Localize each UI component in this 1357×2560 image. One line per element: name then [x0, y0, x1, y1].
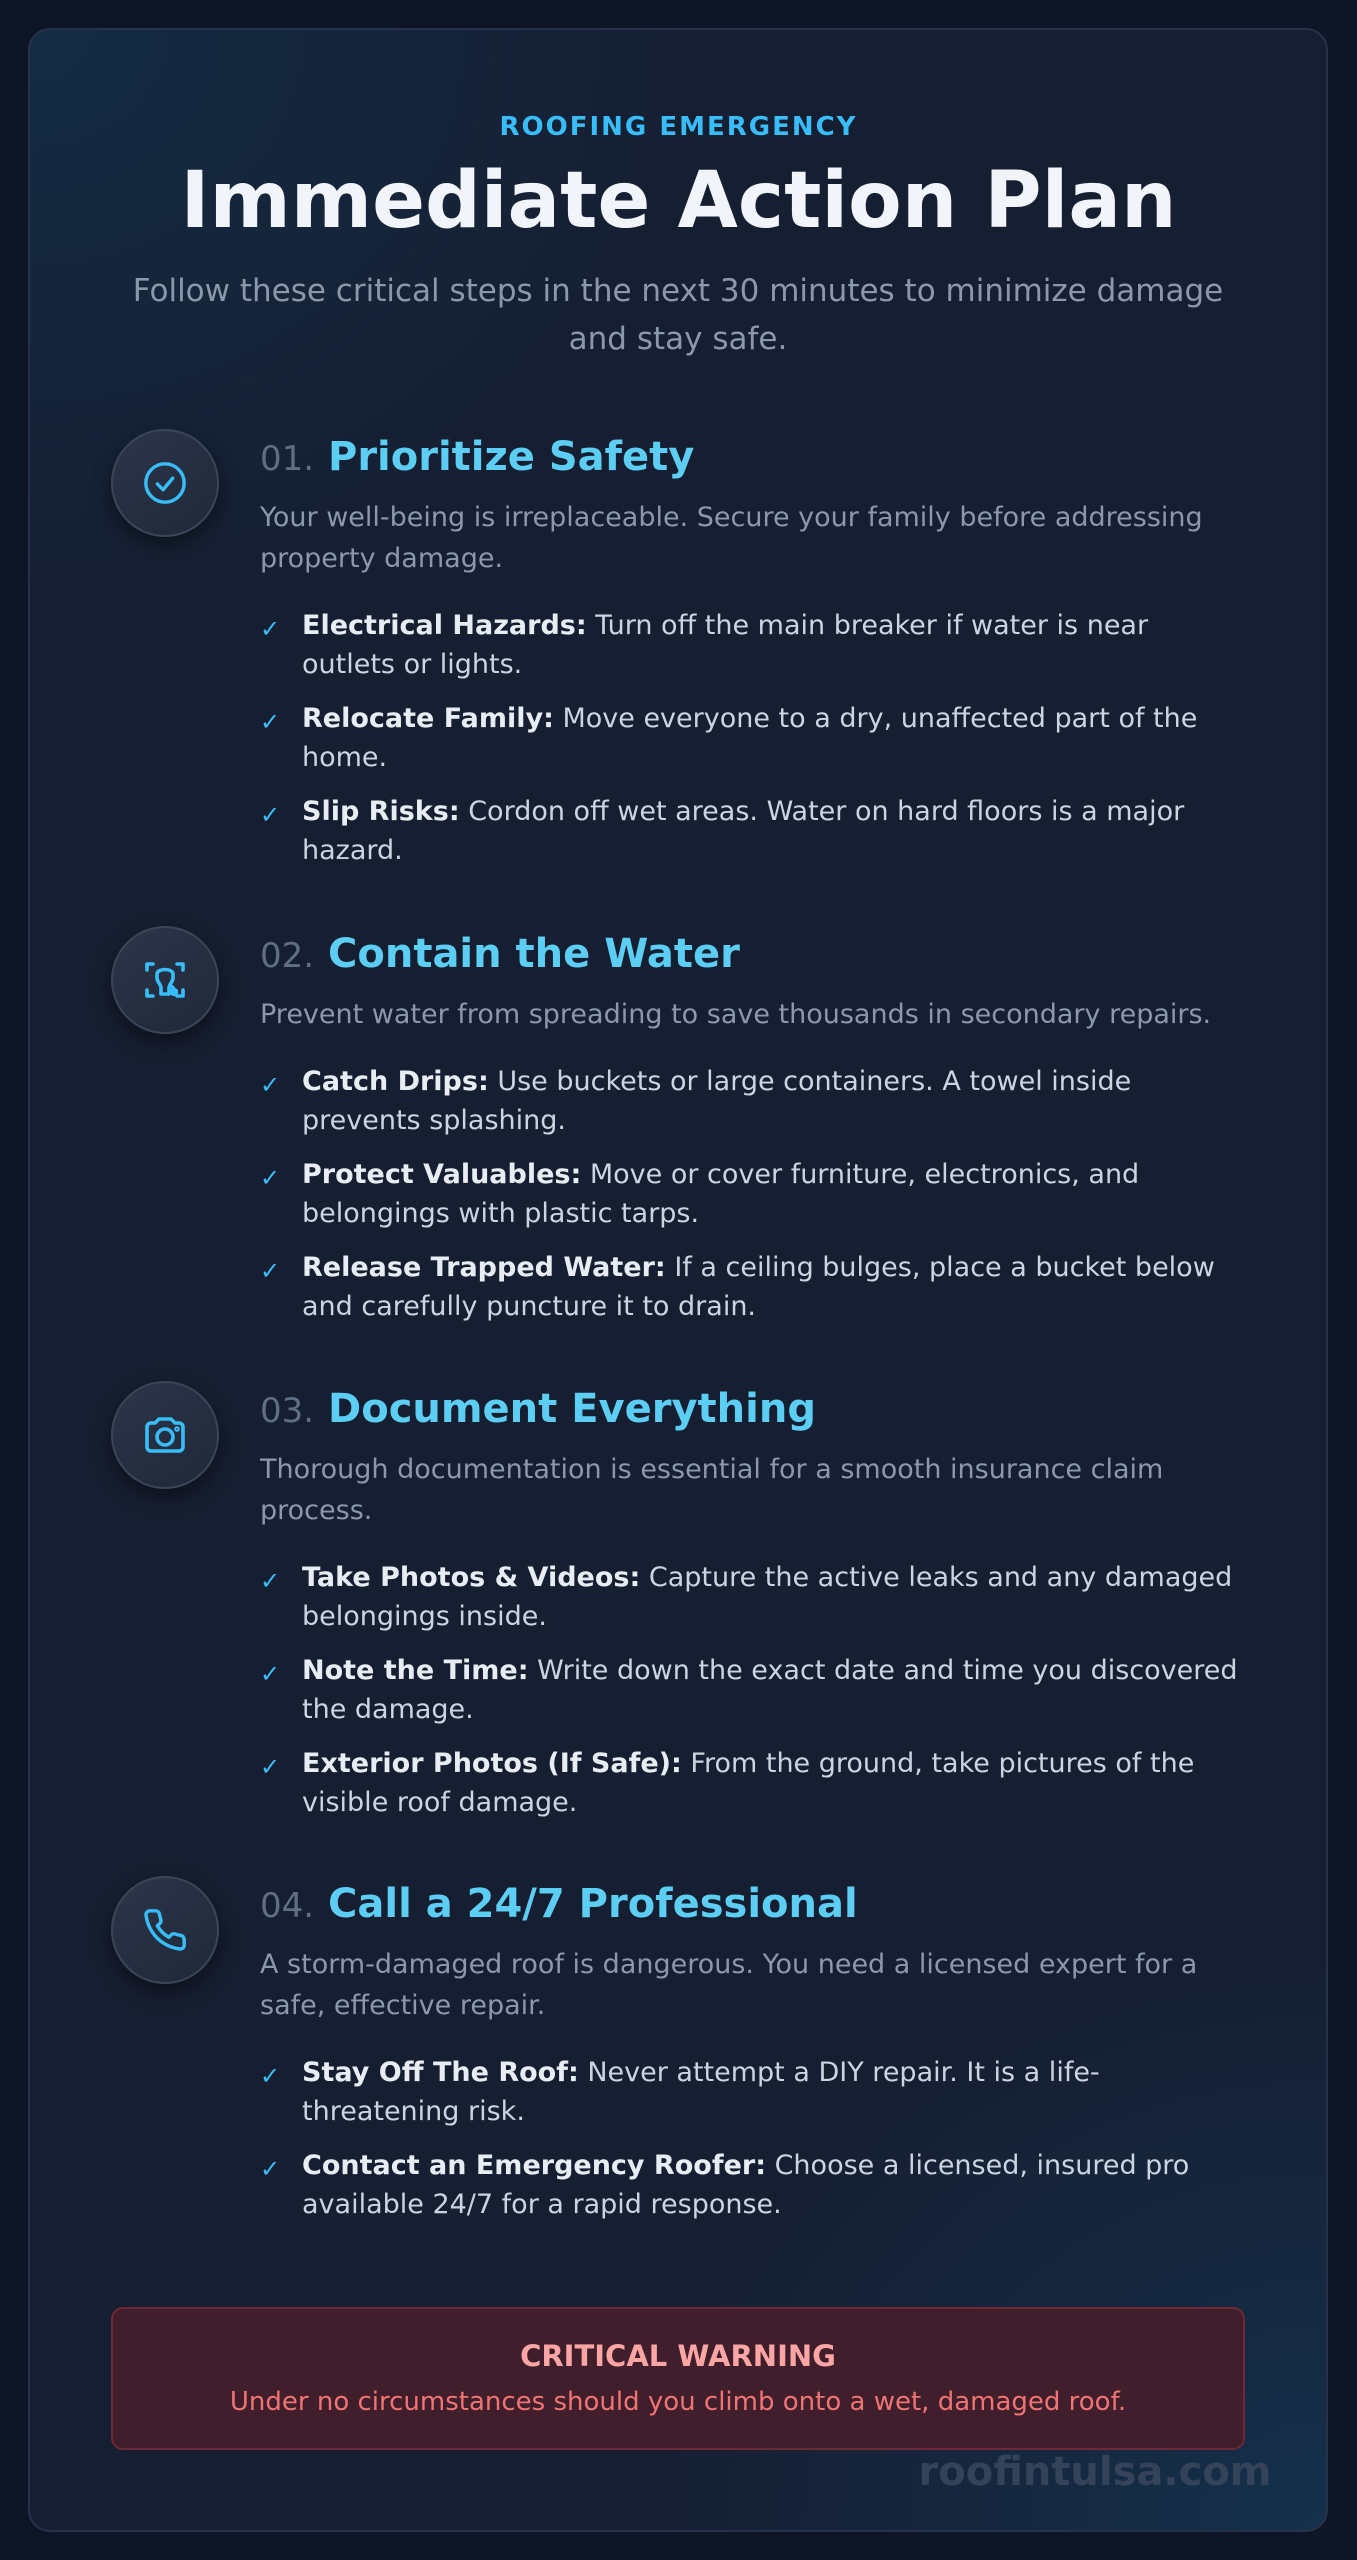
step 1 text: ✓	[260, 708, 280, 736]
step 2 text: ✓	[260, 1071, 280, 1099]
step 1 text: Slip Risks: Cordon off wet areas. Water on hard floors is a major hazard.	[302, 796, 1184, 866]
panel: step 2 contain the water	[108, 926, 1215, 1322]
step 2 text: 02. Contain the Water	[260, 931, 740, 977]
step 4 text: ✓	[260, 2062, 280, 2090]
step 4 text: Stay Off The Roof: Never attempt a DIY repair. It is a life-threatening risk.	[302, 2057, 1100, 2127]
step 4 text: 04. Call a 24/7 Professional	[260, 1881, 858, 1927]
callout: critical warning	[111, 2307, 1245, 2450]
step 4 text: A storm-damaged roof is dangerous. You need a licensed expert for a safe, effective repair.	[260, 1949, 1197, 2021]
step 3 text: 03. Document Everything	[260, 1386, 816, 1432]
panel: step 1 prioritize safety	[108, 429, 1203, 866]
watermark: roofintulsa.com	[918, 2449, 1272, 2495]
step 2 text: Release Trapped Water: If a ceiling bulges, place a bucket below and carefully puncture it to drain.	[302, 1252, 1215, 1322]
step 3 text: Exterior Photos (If Safe): From the ground, take pictures of the visible roof damage.	[302, 1748, 1194, 1818]
step 4 text: ✓	[260, 2155, 280, 2183]
step 3 text: ✓	[260, 1753, 280, 1781]
step 3 text	[260, 1386, 1238, 1818]
step 3 text: ✓	[260, 1660, 280, 1688]
step 3 text: Thorough documentation is essential for a smooth insurance claim process.	[260, 1454, 1163, 1526]
step 3 text: Note the Time: Write down the exact date and time you discovered the damage.	[302, 1655, 1238, 1725]
subtitle: Follow these critical steps in the next 30 minutes to minimize damage and stay safe.	[133, 273, 1223, 357]
step 3 text: ✓	[260, 1567, 280, 1595]
step 2 text: Prevent water from spreading to save thousands in secondary repairs.	[260, 999, 1211, 1030]
step 1 text: ✓	[260, 615, 280, 643]
panel: step 4 call a professional	[108, 1876, 1197, 2220]
panel: step 3 document everything	[108, 1381, 1238, 1818]
icon: camera	[111, 1381, 219, 1489]
icon: phone	[111, 1876, 219, 1984]
step 3 text: Take Photos & Videos: Capture the active leaks and any damaged belongings inside.	[302, 1562, 1232, 1632]
eyebrow: roofing emergency: ROOFING EMERGENCY	[500, 112, 858, 142]
step 1 text: Your well-being is irreplaceable. Secure your family before addressing property damage.	[260, 502, 1203, 574]
step 2 text: ✓	[260, 1257, 280, 1285]
callout: critical warning: Under no circumstances should you climb onto a wet, damaged roof.	[230, 2387, 1126, 2417]
step 1 text: Relocate Family: Move everyone to a dry, unaffected part of the home.	[302, 703, 1197, 773]
step 2 text: ✓	[260, 1164, 280, 1192]
step 1 text: ✓	[260, 801, 280, 829]
step 2 text	[260, 931, 1215, 1322]
callout: critical warning: CRITICAL WARNING	[520, 2339, 836, 2373]
icon: water container	[111, 926, 219, 1034]
step 2 text: Catch Drips: Use buckets or large containers. A towel inside prevents splashing.	[302, 1066, 1131, 1136]
step 4 text: Contact an Emergency Roofer: Choose a licensed, insured pro available 24/7 for a rapid response.	[302, 2150, 1189, 2220]
step 1 text: Electrical Hazards: Turn off the main breaker if water is near outlets or lights.	[302, 610, 1148, 680]
title: Immediate Action Plan	[180, 156, 1176, 246]
icon: check circle	[111, 429, 219, 537]
step 2 text: Protect Valuables: Move or cover furniture, electronics, and belongings with plastic tarps.	[302, 1159, 1139, 1229]
step 1 text: 01. Prioritize Safety	[260, 434, 694, 480]
step 4 text	[260, 1881, 1197, 2220]
step 1 text	[260, 434, 1203, 866]
